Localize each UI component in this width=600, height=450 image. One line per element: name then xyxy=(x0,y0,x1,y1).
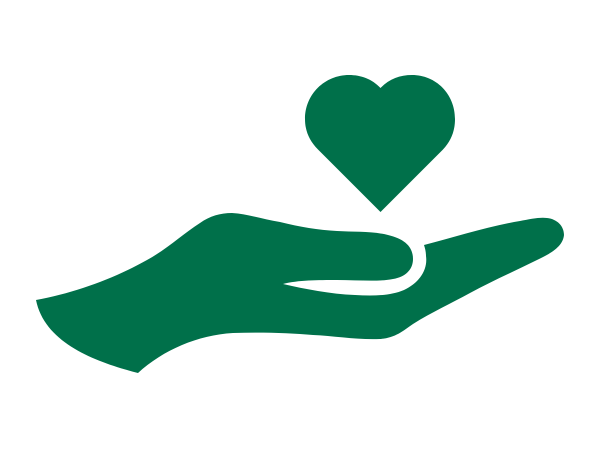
icon: heart xyxy=(305,75,455,212)
icon: open hand xyxy=(36,213,564,373)
